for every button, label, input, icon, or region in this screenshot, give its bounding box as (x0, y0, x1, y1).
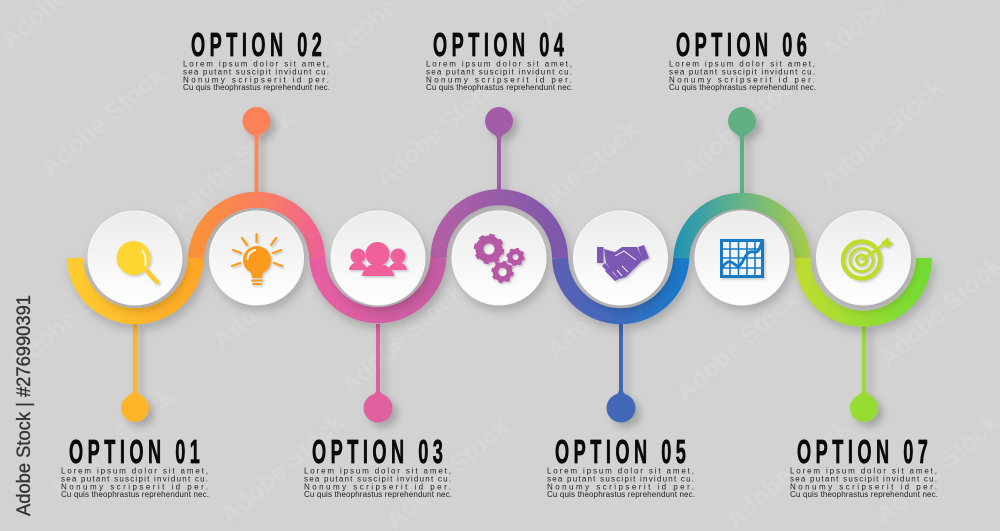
stems and pins (121, 107, 878, 422)
option 05: sea putant suscipit invidunt cu. (547, 474, 694, 484)
watermarks: Adobe Stock (721, 413, 854, 531)
option 02: sea putant suscipit invidunt cu. (183, 68, 329, 76)
option 01 (61, 433, 209, 499)
option 02: OPTION 02 (191, 26, 322, 63)
option 01: Lorem ipsum dolor sit amet, (61, 466, 208, 476)
option 03: OPTION 03 (312, 433, 443, 470)
option 07 (790, 433, 938, 499)
option 03: Cu quis theophrastus reprehendunt nec. (304, 490, 452, 499)
icon: gears (476, 236, 524, 282)
pin 5 (606, 324, 636, 422)
option 07: Nonumy scripserit id per. (790, 482, 937, 492)
watermarks: Adobe Stock (676, 63, 809, 185)
icon: people (349, 242, 407, 276)
option 01: Cu quis theophrastus reprehendunt nec. (61, 490, 209, 499)
option 01: sea putant suscipit invidunt cu. (61, 474, 208, 484)
icon: target (843, 237, 893, 278)
icon: magnifier (116, 241, 157, 282)
watermarks: Adobe Stock (816, 73, 949, 195)
watermarks: Adobe Stock (371, 71, 504, 193)
option 04: OPTION 04 (433, 26, 564, 63)
option 05: Nonumy scripserit id per. (547, 482, 694, 492)
option 04: sea putant suscipit invidunt cu. (426, 68, 572, 76)
pin 7 (850, 324, 878, 422)
option 06: OPTION 06 (676, 26, 807, 63)
option 02 (183, 26, 330, 92)
option 06: Lorem ipsum dolor sit amet, (669, 60, 815, 68)
option 06: Cu quis theophrastus reprehendunt nec. (669, 83, 816, 92)
option 04: Cu quis theophrastus reprehendunt nec. (426, 83, 573, 92)
option 02: Lorem ipsum dolor sit amet, (183, 60, 329, 68)
option 06 (669, 26, 816, 92)
option 01: Nonumy scripserit id per. (61, 482, 208, 492)
option 04 (426, 26, 573, 92)
option 03: Lorem ipsum dolor sit amet, (304, 466, 451, 476)
watermarks: Adobe Stock (541, 243, 674, 365)
watermarks: Adobe Stock (6, 255, 139, 377)
option 07: OPTION 07 (797, 433, 928, 470)
option 01: OPTION 01 (69, 433, 200, 470)
option 03: Nonumy scripserit id per. (304, 482, 451, 492)
watermarks: Adobe Stock (36, 61, 169, 183)
pin 1 (121, 324, 149, 422)
option 06: sea putant suscipit invidunt cu. (669, 68, 815, 76)
watermarks: Adobe Stock (671, 285, 804, 407)
watermarks: Adobe Stock (216, 408, 349, 530)
option 05: Lorem ipsum dolor sit amet, (547, 466, 694, 476)
option 06: Nonumy scripserit id per. (669, 76, 815, 84)
watermarks: Adobe Stock (208, 233, 341, 355)
option 03: sea putant suscipit invidunt cu. (304, 474, 451, 484)
option 03 (304, 433, 452, 499)
icon: chart (721, 240, 763, 277)
option 02: Nonumy scripserit id per. (183, 76, 329, 84)
pin 3 (364, 324, 392, 422)
watermarks: Adobe Stock (166, 105, 299, 227)
option 05: OPTION 05 (555, 433, 686, 470)
option 07: Lorem ipsum dolor sit amet, (790, 466, 937, 476)
option 02: Cu quis theophrastus reprehendunt nec. (183, 83, 330, 92)
watermarks: Adobe Stock (336, 278, 469, 400)
stock id label: Adobe Stock | #276990391 (14, 295, 35, 516)
wave ribbon (75, 197, 924, 319)
pin 2 (242, 107, 270, 193)
icon: light bulb (232, 234, 282, 284)
icon: handshake (597, 245, 649, 281)
option 04: Nonumy scripserit id per. (426, 76, 572, 84)
watermarks: Adobe Stock (511, 115, 644, 237)
watermarks: Adobe Stock (381, 413, 514, 531)
watermarks: Adobe Stock (46, 383, 179, 505)
option 07: sea putant suscipit invidunt cu. (790, 474, 937, 484)
pin 6 (728, 107, 756, 193)
option 07: Cu quis theophrastus reprehendunt nec. (790, 490, 938, 499)
pin 4 (485, 107, 513, 193)
option 05 (547, 433, 695, 499)
option 04: Lorem ipsum dolor sit amet, (426, 60, 572, 68)
option 05: Cu quis theophrastus reprehendunt nec. (547, 490, 695, 499)
circles (88, 211, 910, 305)
